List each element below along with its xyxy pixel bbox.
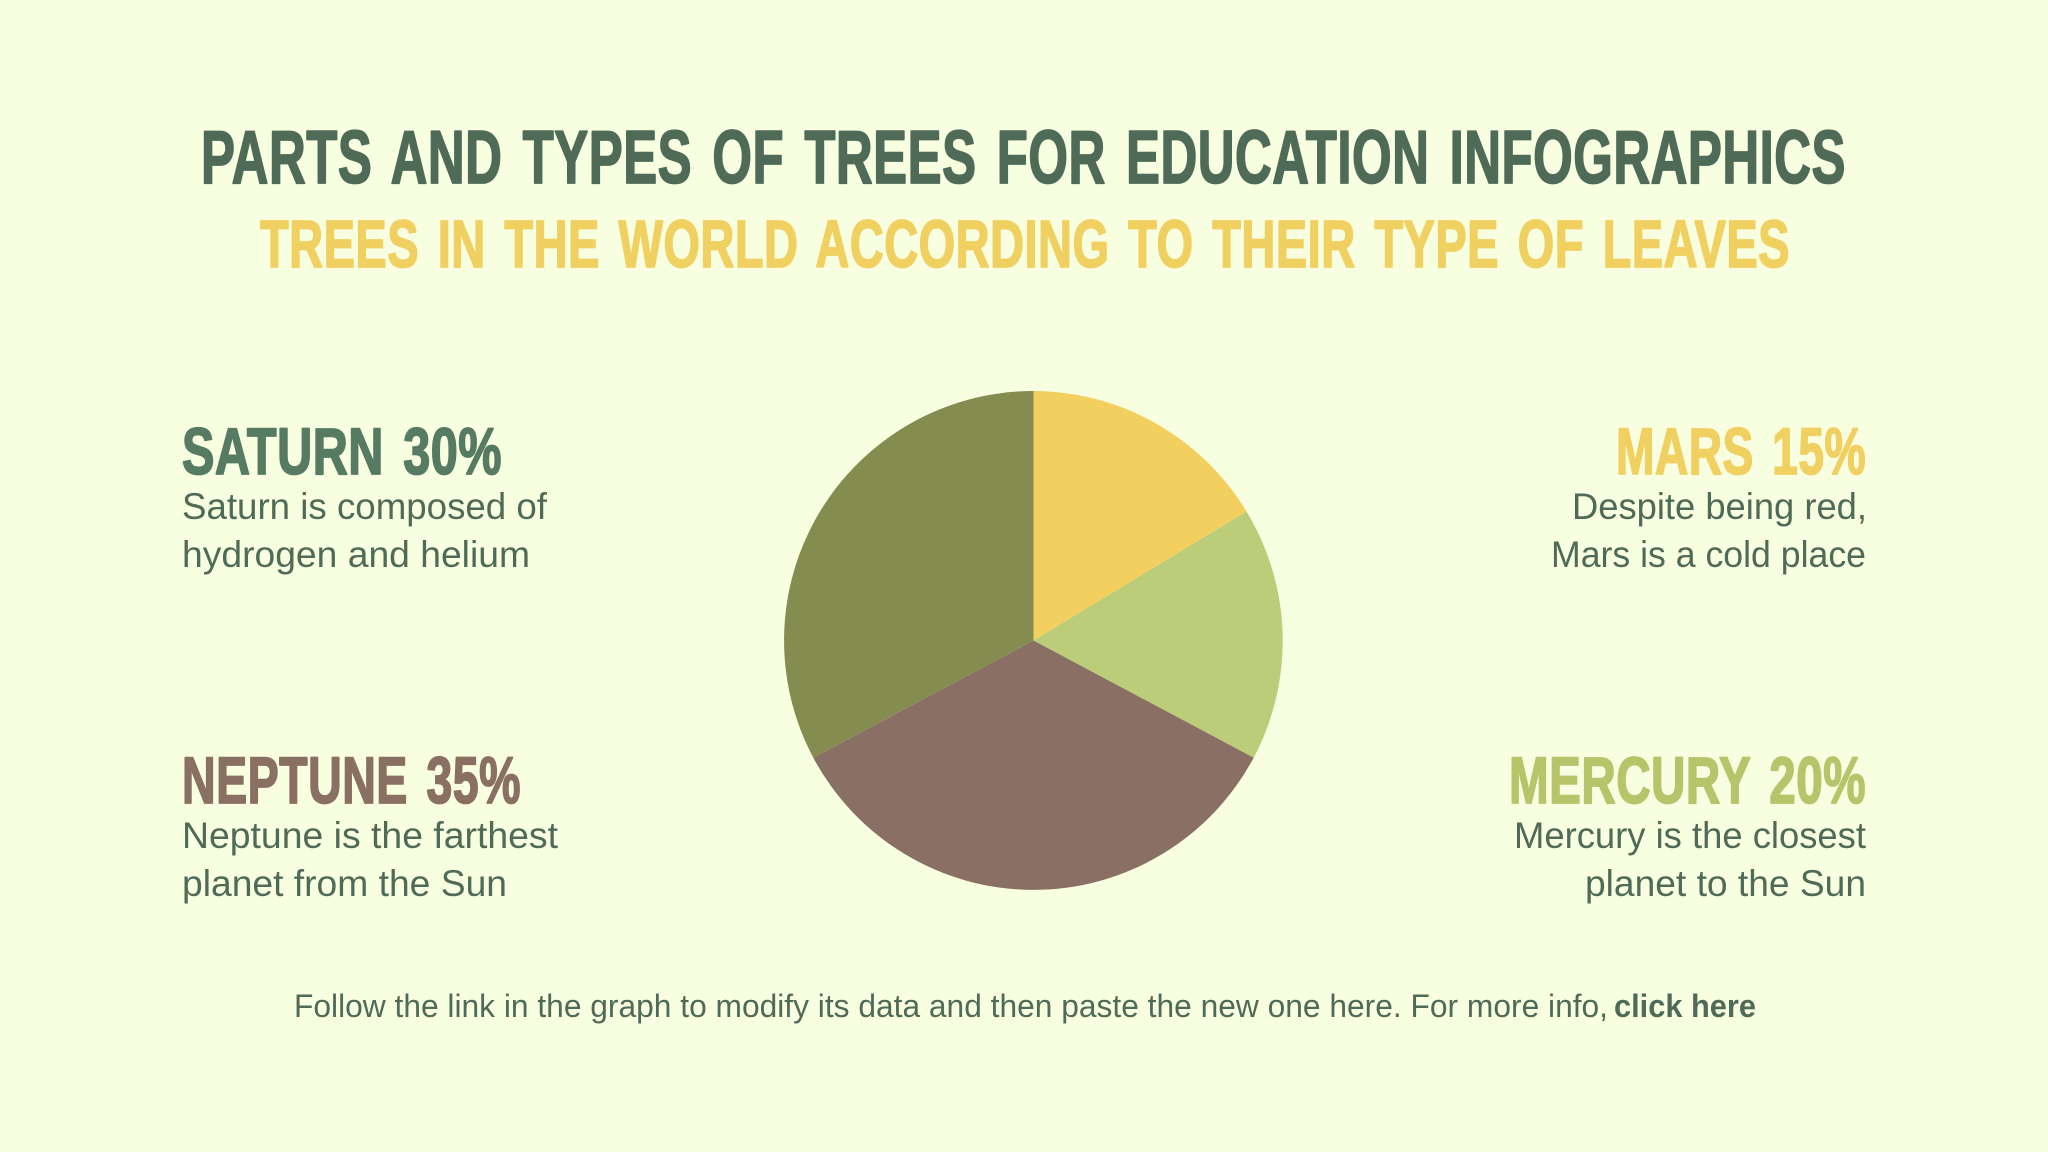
text: Mercury description [1514,815,1867,904]
text: Mars description: Mars is a cold place [1551,534,1866,575]
slice: Neptune brown [813,640,1254,890]
panel: Mars 15% [1551,414,1867,575]
text: Mars description [1551,486,1867,575]
text: Neptune description [182,815,559,904]
footer note: Follow the link in the graph to modify its data and then paste the new one here. For more info, [294,988,1608,1024]
text: Neptune description: Neptune is the farthest [182,815,559,856]
text: Mercury description: Mercury is the closest [1514,815,1867,856]
text: Mars description: Despite being red, [1572,486,1867,527]
slice: Mars yellow [1034,391,1246,640]
slice: Saturn olive [784,391,1034,758]
text: Mercury description: planet to the Sun [1585,863,1866,904]
footer note: click here [1614,988,1756,1024]
slice: Mercury green [1034,512,1283,758]
heading: Mercury: MERCURY 20% [1509,743,1866,817]
panel: Saturn 30% [182,414,548,575]
heading: Neptune: NEPTUNE 35% [182,743,521,817]
panel: Mercury 20% [1509,743,1867,904]
text: Neptune description: planet from the Sun [182,863,507,904]
text: Saturn description: Saturn is composed of [182,486,548,527]
text: Saturn description [182,486,548,575]
pie chart [784,391,1283,890]
heading: Saturn: SATURN 30% [182,414,502,488]
heading: Mars: MARS 15% [1616,414,1866,488]
panel: Neptune 35% [182,743,559,904]
text: Saturn description: hydrogen and helium [182,534,530,575]
